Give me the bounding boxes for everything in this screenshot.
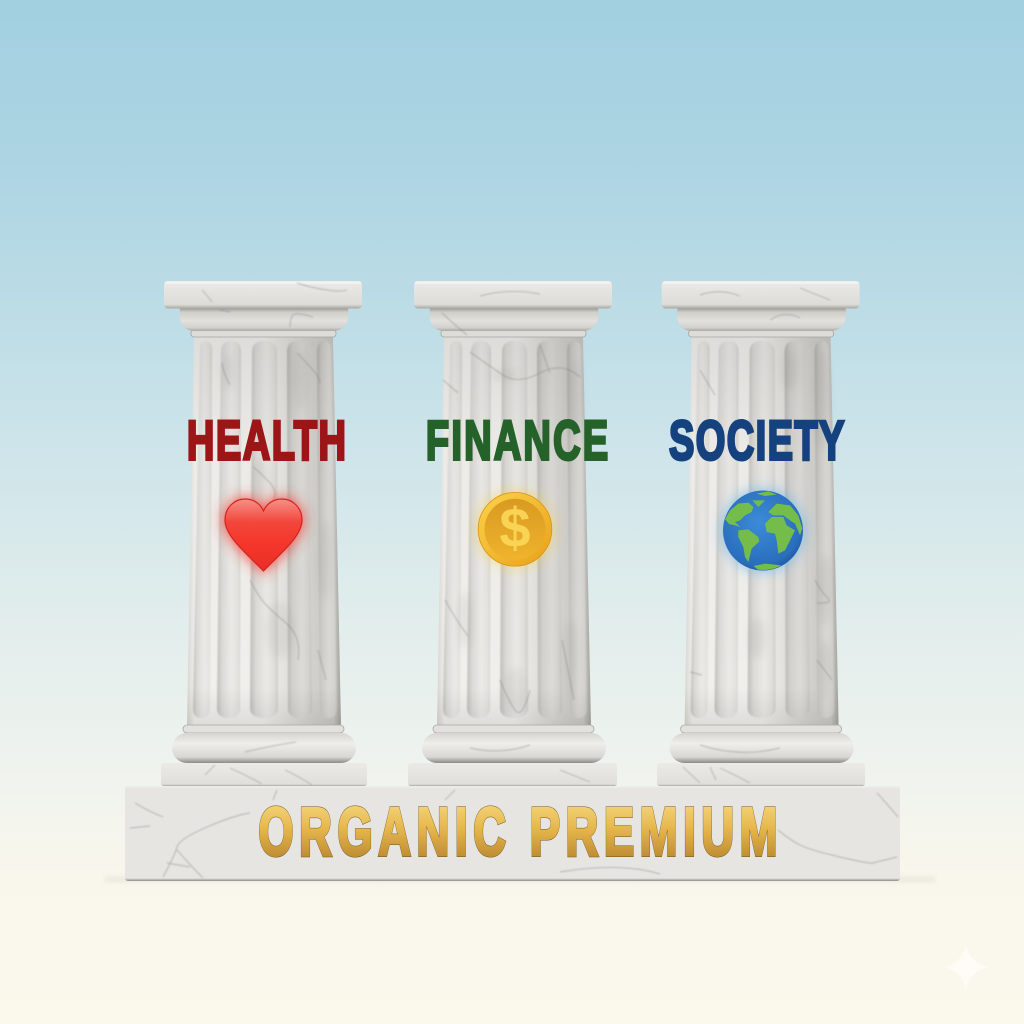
title: organic premium: ORGANIC PREMIUM	[258, 795, 777, 870]
marble veins: pedestal	[130, 790, 898, 878]
marble smudges: finance	[457, 360, 583, 712]
plinth: finance	[408, 763, 617, 786]
label: society: SOCIETY	[669, 410, 844, 472]
label: finance: FINANCE	[426, 410, 608, 472]
column: health	[161, 281, 367, 786]
marble veins: society	[683, 288, 832, 783]
icon: globe	[722, 490, 804, 572]
plinth: society	[657, 763, 865, 786]
icon: dollar coin: $	[499, 496, 531, 559]
marble veins: health	[202, 283, 347, 785]
marble smudges: society	[749, 350, 832, 700]
pedestal: organic premium	[125, 786, 900, 881]
title: organic premium: ORGANIC PREMIUM	[258, 795, 777, 870]
marble veins: finance	[442, 291, 590, 782]
icon: sparkle watermark	[944, 945, 988, 989]
icon: heart	[223, 497, 304, 574]
ground shadow	[105, 877, 935, 882]
icon: dollar coin	[477, 491, 553, 567]
column: finance	[408, 281, 617, 786]
plinth: health	[161, 763, 367, 786]
marble smudges: health	[222, 350, 332, 658]
column: society	[657, 281, 865, 786]
label: health: HEALTH	[187, 410, 346, 472]
